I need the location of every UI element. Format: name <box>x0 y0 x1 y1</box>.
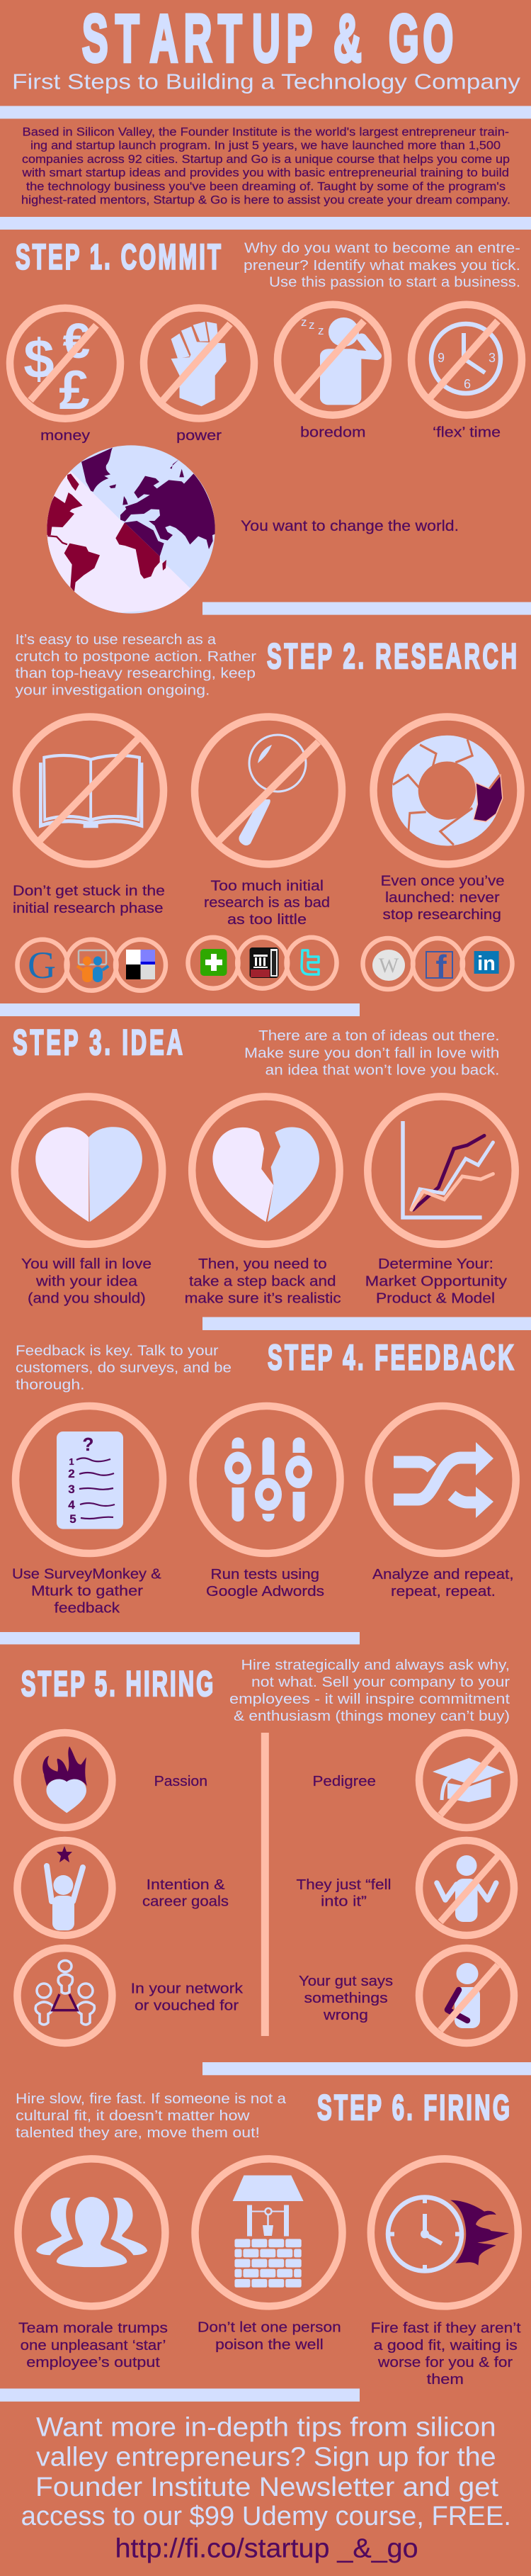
icon: survey document: ? <box>83 1434 93 1455</box>
icon: magnifier crossed out <box>195 717 342 865</box>
intro paragraph <box>21 125 510 207</box>
step 3 captions: Product & Model <box>376 1290 495 1306</box>
heading: step 4: STEP 4. FEEDBACK <box>268 1337 514 1378</box>
icon: shuffle arrows <box>369 1406 516 1553</box>
step 6 description: Hire slow, fire fast. If someone is not a <box>16 2091 287 2107</box>
footer call to action: valley entrepreneurs? Sign up for the <box>36 2442 496 2472</box>
step 2 captions: research is as bad <box>204 895 330 911</box>
icon: clock crossed out: 3 <box>489 351 496 365</box>
step 1 description: Why do you want to become an entre- <box>244 241 520 257</box>
footer call to action <box>21 2413 511 2531</box>
step 4 captions: Run tests using <box>211 1567 319 1582</box>
right column labels: somethings <box>304 1991 388 2006</box>
icon: heart <box>15 1096 162 1244</box>
step 3 description: There are a ton of ideas out there. <box>258 1028 500 1044</box>
globe <box>47 445 215 614</box>
step 6 description: cultural fit, it doesn’t matter how <box>16 2108 250 2124</box>
title: STARTUP & GO <box>82 1 453 76</box>
icon: sliders <box>193 1406 340 1553</box>
step 2 description <box>16 632 256 699</box>
step 2 description: crutch to postpone action. Rather <box>16 649 256 665</box>
step 6 description: talented they are, move them out! <box>16 2125 260 2141</box>
icon: survey document: 1 <box>69 1456 74 1467</box>
icon labels: ‘flex’ time <box>433 425 501 441</box>
step 6 captions <box>18 2320 521 2387</box>
step 2 description: your investigation ongoing. <box>16 683 210 699</box>
intro paragraph: the technology business you've been dreaming of. Taught by some of the program's <box>26 180 506 193</box>
intro paragraph: highest-rated mentors, Startup & Go is here to assist you create your dream company. <box>21 194 510 207</box>
step 1 description <box>244 241 520 291</box>
icon: person reaching for star <box>17 1840 112 1935</box>
step 6 captions: Team morale trumps <box>18 2321 168 2336</box>
heading: step 1: STEP 1. COMMIT <box>16 237 221 276</box>
step 4 captions <box>12 1567 514 1616</box>
icon: bored person crossed out: z <box>301 315 307 329</box>
icon: money crossed out: $ <box>23 327 55 390</box>
icon: graduation cap crossed out <box>419 1733 514 1828</box>
left column labels: or vouched for <box>135 1998 239 2014</box>
step 4 captions: Google Adwords <box>206 1584 324 1599</box>
step 2 captions: stop researching <box>382 907 501 923</box>
icon: linkedin <box>474 951 499 975</box>
step 6 captions: employee’s output <box>26 2355 160 2370</box>
icon: money crossed out: € <box>63 313 90 369</box>
step 4 captions: feedback <box>54 1600 120 1616</box>
icon: bored person crossed out: z <box>318 324 324 337</box>
footer call to action: Founder Institute Newsletter and get <box>35 2473 498 2502</box>
right column labels <box>296 1774 393 2023</box>
right column labels: into it” <box>321 1894 367 1910</box>
step 3 captions: (and you should) <box>28 1290 146 1306</box>
step 3 description <box>244 1028 500 1078</box>
left column labels: Intention & <box>147 1877 225 1893</box>
panel: step 2 research <box>13 632 521 991</box>
step 6 captions: poison the well <box>215 2337 324 2353</box>
step 2 description: It’s easy to use research as a <box>16 632 217 648</box>
step 3 description: an idea that won’t love you back. <box>265 1062 500 1078</box>
icon: wayback machine <box>249 947 279 978</box>
icon labels: money <box>40 428 90 444</box>
icon: survey document: 2 <box>68 1467 75 1480</box>
icon: shrugging person crossed out <box>419 1840 514 1935</box>
icon labels <box>40 425 501 444</box>
step 4 description <box>16 1344 232 1393</box>
step 2 captions: launched: never <box>385 890 500 906</box>
panel: step 5 hiring <box>17 1658 514 2043</box>
step 1 description: Use this passion to start a business. <box>269 275 520 291</box>
step 6 captions: them <box>427 2372 464 2387</box>
icon: broken heart <box>192 1096 340 1244</box>
icon: wikipedia <box>372 950 405 981</box>
icon: evernote-style green plus <box>200 949 227 976</box>
step 3 captions: Determine Your: <box>378 1256 493 1272</box>
icon labels: power <box>176 428 222 444</box>
step 2 captions: initial research phase <box>13 901 163 916</box>
subtitle: First Steps to Building a Technology Company <box>12 69 521 94</box>
icon: network of people <box>17 1948 112 2043</box>
world caption: You want to change the world. <box>241 518 459 534</box>
icon: clock crossed out: 6 <box>464 377 471 391</box>
icon: clock crossed out <box>411 305 522 415</box>
right column labels: They just “fell <box>296 1877 391 1893</box>
icon: bored person crossed out <box>278 305 388 415</box>
step 2 description: than top-heavy researching, keep <box>16 666 256 682</box>
heading: step 3: STEP 3. IDEA <box>13 1022 183 1062</box>
icon: bored person crossed out: z <box>309 318 314 332</box>
step 5 description: employees - it will inspire commitment <box>229 1692 510 1707</box>
icon: facebook <box>426 948 452 985</box>
icon: fist crossed out <box>144 308 254 418</box>
intro paragraph: ing and startup launch program. In just 5 years, we have launched more than 1,500 <box>30 140 501 152</box>
heading: step 5: STEP 5. HIRING <box>21 1663 213 1704</box>
right column labels: Pedigree <box>313 1774 376 1789</box>
step 2 captions: Too much initial <box>211 879 324 894</box>
intro paragraph: companies across 92 cities. Startup and Go is a unique course that helps you come up <box>22 153 510 166</box>
icon row: research tools <box>17 938 513 991</box>
right column labels: wrong <box>323 2008 368 2023</box>
step 4 description: thorough. <box>16 1378 85 1393</box>
step 1 description: preneur? Identify what makes you tick. <box>244 258 520 274</box>
icon: book crossed out <box>16 717 164 865</box>
step 3 captions <box>21 1256 507 1306</box>
step 6 captions: worse for you & for <box>377 2355 513 2370</box>
heading: step 6: STEP 6. FIRING <box>317 2087 510 2127</box>
step 3 captions: with your idea <box>35 1273 138 1289</box>
step 3 captions: Then, you need to <box>198 1256 327 1272</box>
icon: clock crossed out: 9 <box>438 351 445 365</box>
right column labels: Your gut says <box>299 1974 393 1989</box>
panel: step 6 firing <box>16 2087 521 2387</box>
step 4 captions: repeat, repeat. <box>391 1584 496 1599</box>
step 5 description <box>229 1658 510 1724</box>
icon: slideshare <box>76 950 109 982</box>
step 2 captions: as too little <box>227 912 307 928</box>
icon: google: G <box>28 944 56 986</box>
step 3 captions: take a step back and <box>189 1273 336 1289</box>
footer call to action: Want more in-depth tips from silicon <box>36 2413 496 2443</box>
icon: survey document <box>16 1406 163 1553</box>
icon: survey document: 4 <box>68 1498 75 1512</box>
icon: line chart <box>367 1096 515 1244</box>
step 4 description: Feedback is key. Talk to your <box>16 1344 219 1359</box>
heading: step 2: STEP 2. RESEARCH <box>267 636 517 676</box>
left column labels: In your network <box>131 1981 244 1997</box>
icon: wishing well <box>195 2159 343 2306</box>
left column labels: career goals <box>142 1894 229 1910</box>
icon: person with hand on gut crossed out <box>419 1948 514 2043</box>
icon: research cycle <box>374 717 521 865</box>
step 4 captions: Analyze and repeat, <box>372 1567 514 1582</box>
step 5 description: & enthusiasm (things money can’t buy) <box>234 1709 510 1724</box>
step 2 captions: Even once you’ve <box>381 873 505 889</box>
step 2 captions: Don’t get stuck in the <box>13 884 165 899</box>
icon labels: boredom <box>300 425 365 441</box>
icon: delicious <box>126 950 155 979</box>
step 3 captions: You will fall in love <box>21 1256 152 1272</box>
icon: heart with flame <box>17 1733 112 1828</box>
step 6 captions: Don’t let one person <box>198 2320 341 2336</box>
step 5 description: Hire strategically and always ask why, <box>241 1658 510 1673</box>
panel: step 3 idea <box>13 1022 515 1306</box>
footer url: http://fi.co/startup _&_go <box>115 2534 418 2564</box>
step 6 captions: a good fit, waiting is <box>374 2338 518 2353</box>
icon: money crossed out <box>10 308 120 421</box>
step 4 captions: Mturk to gather <box>31 1584 143 1599</box>
intro paragraph: Based in Silicon Valley, the Founder Institute is the world's largest entrepreneur train- <box>23 125 509 138</box>
step 4 captions: Use SurveyMonkey & <box>12 1567 161 1582</box>
footer call to action: access to our $99 Udemy course, FREE. <box>21 2502 511 2531</box>
step 2 captions <box>13 873 505 928</box>
left column labels <box>131 1774 244 2014</box>
icon: survey document: 5 <box>69 1512 76 1526</box>
icon: facebook: f <box>435 948 447 985</box>
panel: step 4 feedback <box>12 1337 516 1616</box>
icon: clock with flames <box>371 2159 518 2306</box>
intro paragraph: with smart startup ideas and provides you with basic entrepreneurial training to build <box>21 167 509 179</box>
step 6 captions: one unpleasant ‘star’ <box>21 2338 166 2353</box>
step 6 description <box>16 2091 287 2141</box>
icon: linkedin: in <box>477 952 496 975</box>
icon: money crossed out: £ <box>59 359 90 421</box>
step 3 captions: make sure it’s realistic <box>185 1290 341 1306</box>
icon: team silhouettes <box>18 2159 165 2306</box>
icon: survey document: 3 <box>68 1483 75 1496</box>
icon: twitter <box>302 950 319 974</box>
step 5 description: not what. Sell your company to your <box>251 1675 510 1690</box>
panel: step 1 commit <box>10 237 522 619</box>
left column labels: Passion <box>154 1774 207 1789</box>
icon: wikipedia: W <box>379 954 399 977</box>
step 3 description: Make sure you don’t fall in love with <box>244 1045 500 1061</box>
step 4 description: customers, do surveys, and be <box>16 1361 232 1376</box>
step 6 captions: Fire fast if they aren’t <box>371 2321 521 2336</box>
step 3 captions: Market Opportunity <box>365 1273 507 1289</box>
